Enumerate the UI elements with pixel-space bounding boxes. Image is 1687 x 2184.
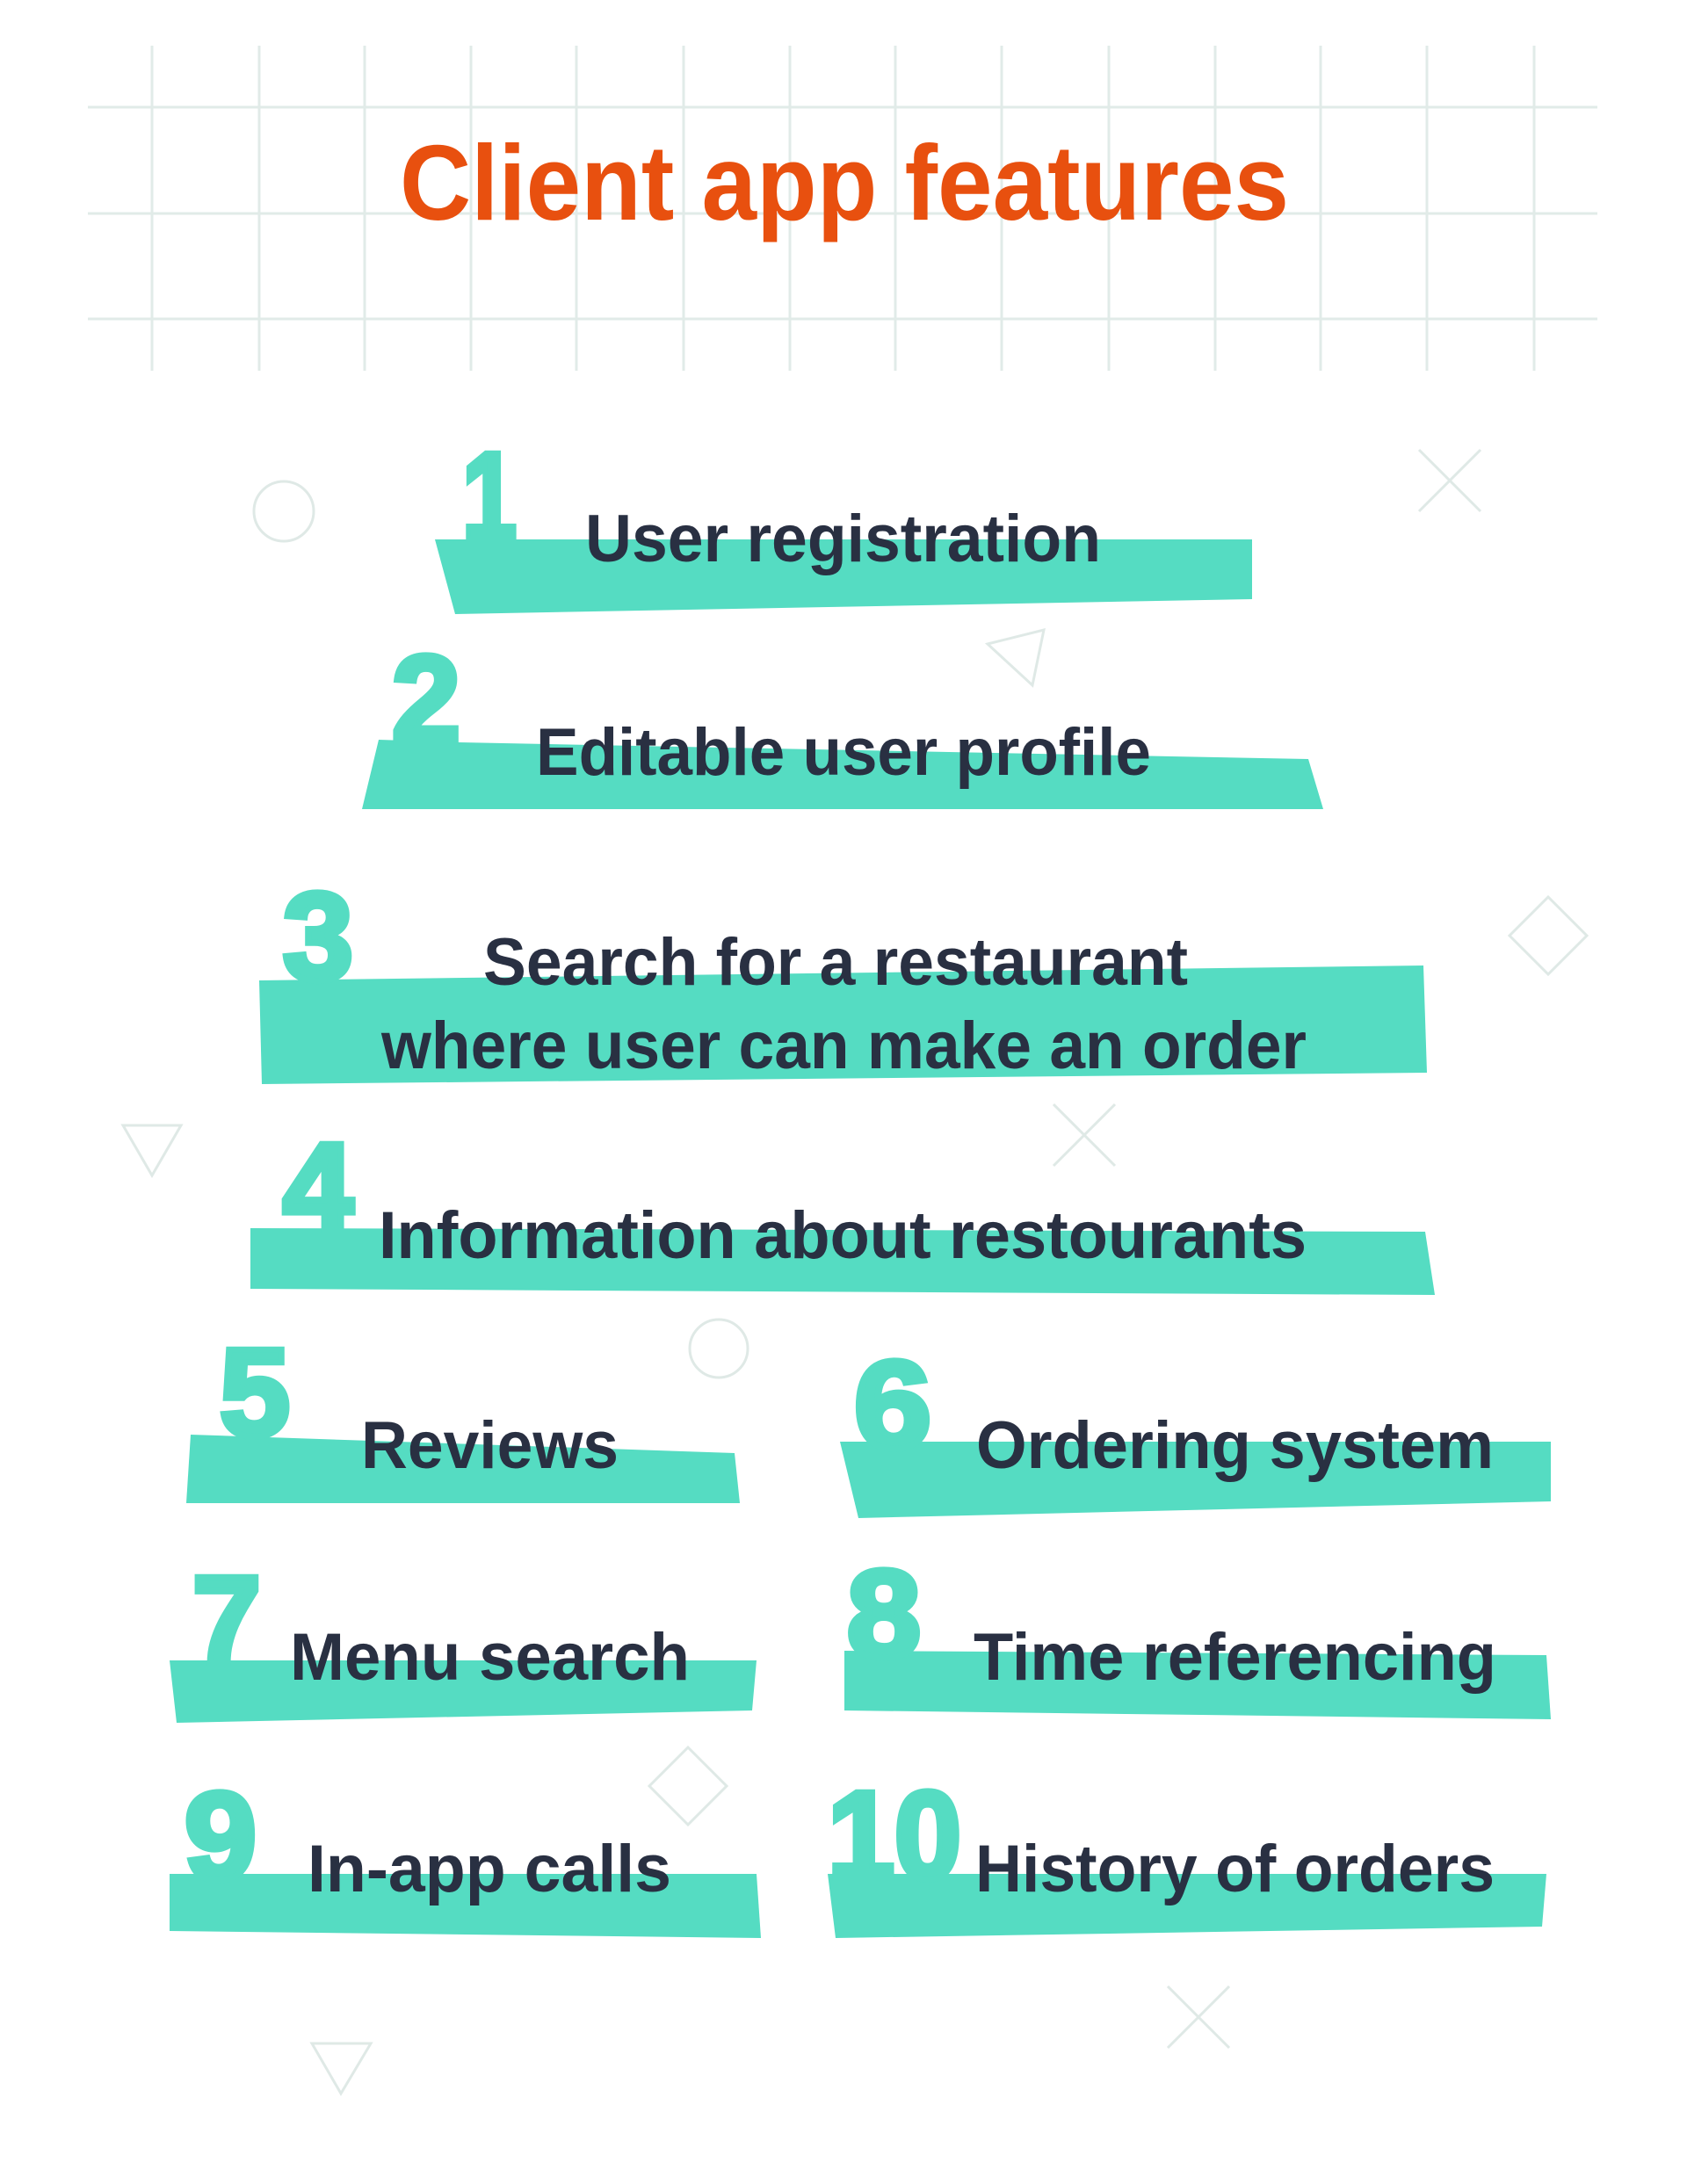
item 10: History of orders: History of orders — [975, 1832, 1495, 1906]
item 4: Information about restourants: 4 — [283, 1117, 353, 1257]
item 4: Information about restourants: Information about restourants — [379, 1198, 1307, 1273]
title: Client app features — [400, 123, 1289, 242]
item 5: Reviews: 5 — [220, 1323, 290, 1463]
item 6: Ordering system: Ordering system — [976, 1408, 1494, 1483]
item 7: Menu search — [170, 1551, 757, 1723]
item 3: Search for a restaurant: 3 — [283, 867, 353, 1007]
item 2: Editable user profile: 2 — [392, 630, 460, 770]
item 8: Time referencing: 8 — [847, 1544, 921, 1684]
item 1: User registration: 1 — [462, 427, 517, 567]
item 6: Ordering system — [840, 1335, 1551, 1518]
item 5: Reviews — [186, 1323, 740, 1503]
item 10: History of orders — [828, 1766, 1546, 1938]
item 7: Menu search: Menu search — [290, 1620, 690, 1695]
item 7: Menu search: 7 — [192, 1551, 261, 1690]
item 6: Ordering system: 6 — [854, 1335, 931, 1475]
item 1: User registration: User registration — [585, 502, 1101, 576]
item 5: Reviews: Reviews — [361, 1408, 619, 1483]
decorative shapes — [123, 450, 1587, 2094]
item 4: Information about restourants — [250, 1117, 1435, 1295]
item 9: In-app calls: In-app calls — [308, 1832, 671, 1906]
item 3: Search for a restaurant: where user can make an order — [380, 1009, 1307, 1083]
item 10: History of orders: 10 — [828, 1766, 961, 1906]
item 9: In-app calls — [170, 1767, 761, 1938]
item 2: Editable user profile — [362, 630, 1323, 809]
item 2: Editable user profile: Editable user profile — [536, 715, 1151, 790]
item 8: Time referencing — [844, 1544, 1551, 1719]
item 8: Time referencing: Time referencing — [974, 1620, 1496, 1695]
item 3: Search for a restaurant: Search for a restaurant — [483, 925, 1188, 1000]
item 9: In-app calls: 9 — [185, 1767, 257, 1906]
item 1: User registration — [435, 427, 1252, 614]
item 3: Search for a restaurant — [259, 867, 1427, 1084]
